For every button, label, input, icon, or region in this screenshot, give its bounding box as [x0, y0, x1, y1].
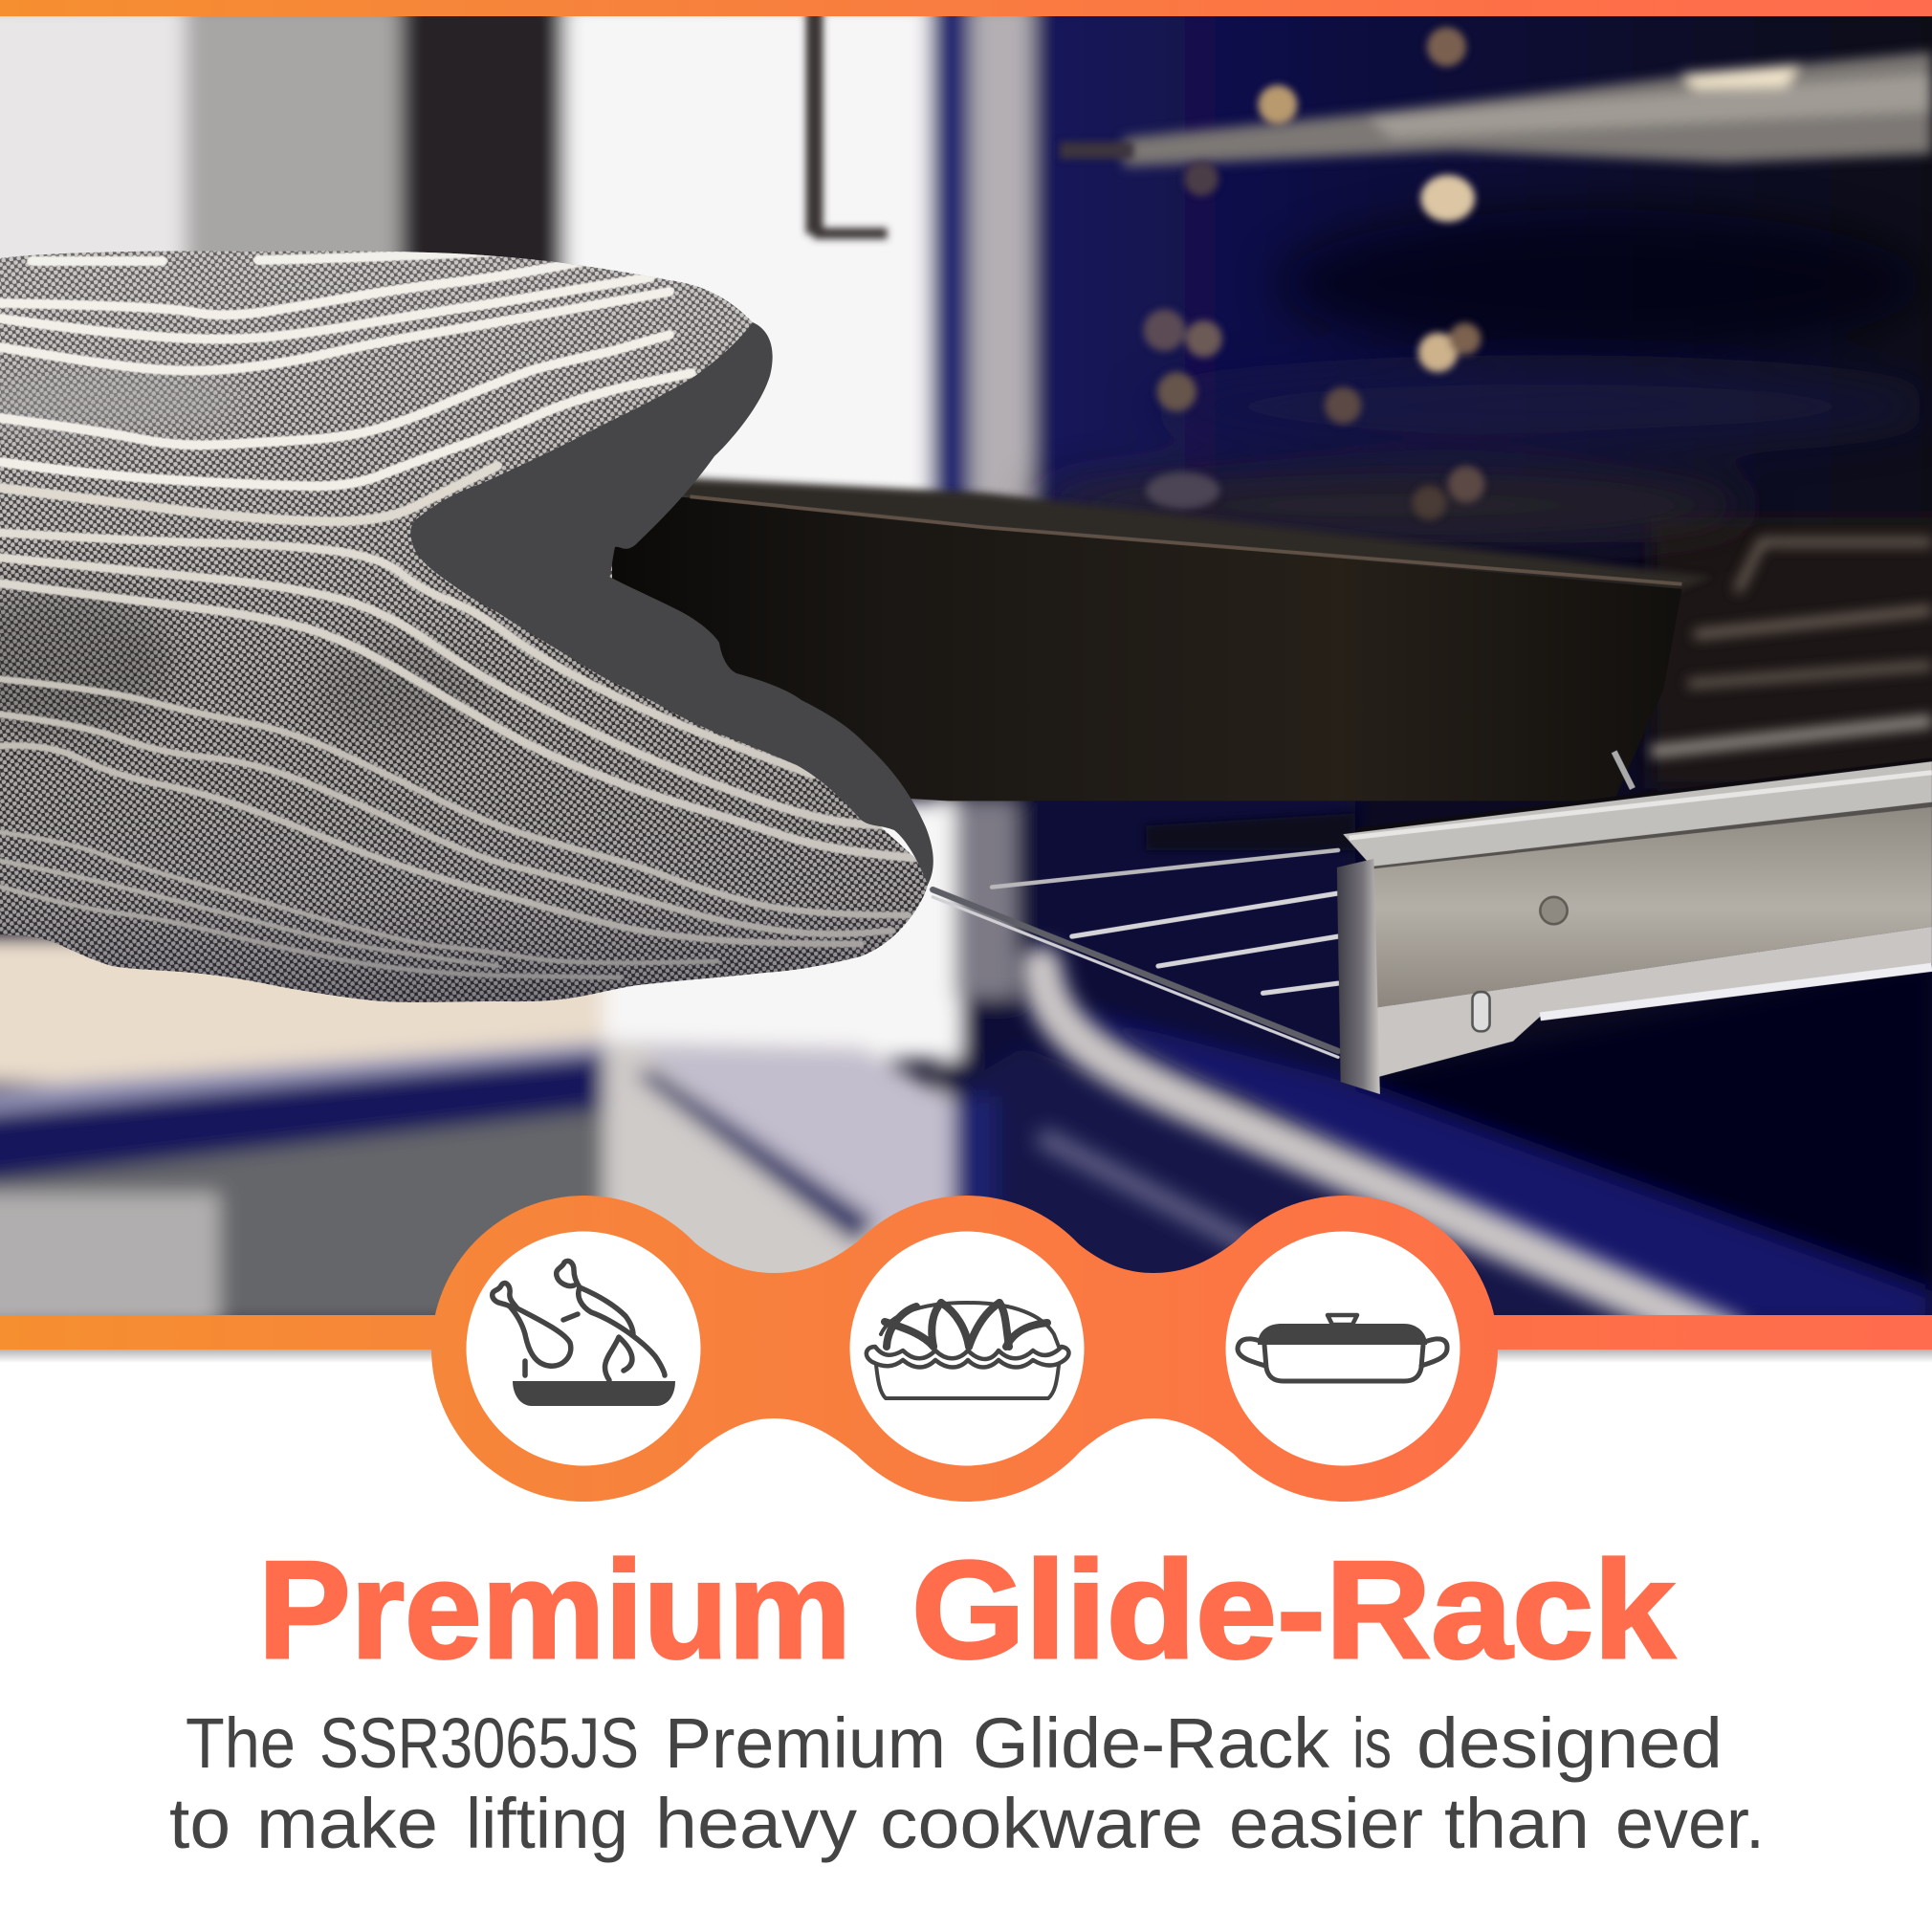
upper blurred rack [1124, 52, 1932, 166]
description line 2: ever. [1615, 1784, 1765, 1863]
description line 2: easier [1229, 1784, 1423, 1863]
description line 1: Glide-Rack [973, 1703, 1330, 1783]
description line 1: is [1352, 1703, 1392, 1783]
title: Premium [258, 1532, 851, 1687]
photo background: kitchen and oven [0, 0, 1932, 1337]
icon band [431, 1196, 1498, 1502]
glide rail [1337, 761, 1932, 1094]
blurred rear rack right of the pan [1651, 542, 1932, 752]
blurred kitchen shapes [0, 0, 1932, 1328]
description line 1: The [186, 1703, 296, 1783]
baking pan [542, 474, 1713, 801]
description line 2 [169, 1784, 1765, 1863]
icon: roast chicken over pan [493, 1261, 675, 1406]
description line 2: lifting [466, 1784, 628, 1863]
description line 2: than [1444, 1784, 1590, 1863]
top gradient bar [0, 0, 1932, 16]
mitt dark lining [410, 322, 933, 885]
description line 1: SSR3065JS [319, 1703, 639, 1783]
middle gradient bar [0, 1315, 1932, 1350]
oven mitt [0, 244, 956, 1009]
white lower panel [0, 1350, 1932, 1932]
door post line [806, 0, 888, 239]
description line 2: make [256, 1784, 438, 1863]
icon: lattice pie [867, 1303, 1069, 1398]
dark shelf reflections [1035, 209, 1932, 542]
description line 2: cookware [880, 1784, 1203, 1863]
description line 1: designed [1416, 1703, 1723, 1783]
icon: covered casserole pot [1238, 1315, 1447, 1381]
description line 1: Premium [665, 1703, 946, 1783]
title: Glide-Rack [911, 1532, 1675, 1687]
mitt stripes [0, 251, 915, 977]
description line 2: heavy [655, 1784, 857, 1863]
title [258, 1532, 1675, 1687]
description line 1 [186, 1703, 1723, 1783]
description line 2: to [169, 1784, 231, 1863]
wire rack [933, 757, 1932, 1057]
bar shadow [0, 1350, 1932, 1363]
woven fabric [0, 244, 956, 1009]
lower silver oven rod [1042, 967, 1725, 1337]
bokeh lights [1060, 27, 1484, 520]
mitt shading [0, 368, 488, 736]
